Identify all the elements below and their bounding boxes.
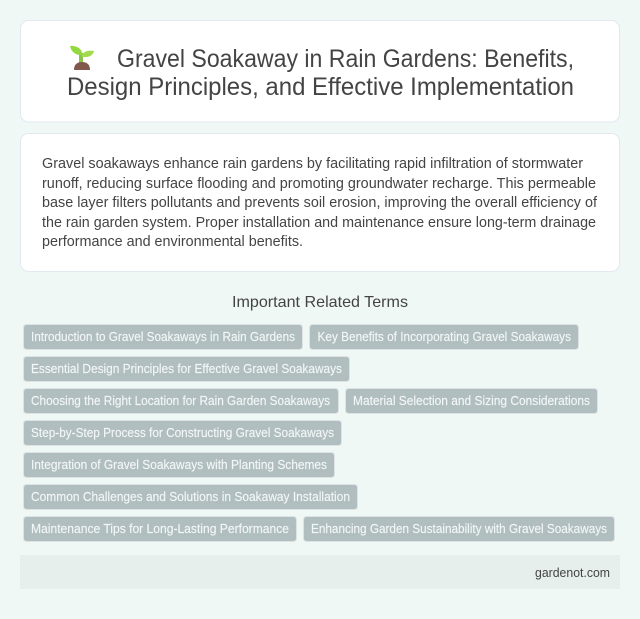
- summary text: the rain garden system. Proper installation and maintenance ensure long-term drainage: [42, 215, 596, 231]
- icon: sprout: [70, 46, 94, 70]
- tag: process: [24, 420, 342, 446]
- tag: material: [346, 388, 598, 414]
- summary text: [42, 156, 598, 250]
- tag: challenges: [24, 484, 358, 510]
- header panel: [20, 20, 620, 122]
- tag: design principles: [24, 356, 350, 382]
- tag: design principles: Essential Design Principles for Effective Gravel Soakaways: [31, 362, 342, 376]
- tag: key benefits: Key Benefits of Incorporating Gravel Soakaways: [318, 330, 571, 344]
- tag: challenges: Common Challenges and Solutions in Soakaway Installation: [31, 490, 350, 504]
- related terms tags: [24, 324, 614, 542]
- tag: material: Material Selection and Sizing Considerations: [353, 394, 590, 408]
- tag: location: Choosing the Right Location for Rain Garden Soakaways: [31, 394, 330, 408]
- tag: introduction: [24, 324, 302, 350]
- summary text: base layer filters pollutants and prevents soil erosion, improving the overall efficiency of: [42, 195, 598, 211]
- tag: planting: Integration of Gravel Soakaways with Planting Schemes: [31, 458, 327, 472]
- title: Design Principles, and Effective Implementation: [67, 73, 574, 101]
- related terms heading: Important Related Terms: [232, 294, 408, 311]
- footer source: gardenot.com: [535, 566, 610, 580]
- footer: [20, 555, 620, 589]
- summary text: runoff, reducing surface flooding and promoting groundwater recharge. This permeable: [42, 176, 596, 192]
- tag: sustainability: [304, 516, 614, 542]
- tag: process: Step-by-Step Process for Constructing Gravel Soakaways: [31, 426, 334, 440]
- tag: introduction: Introduction to Gravel Soakaways in Rain Gardens: [31, 330, 295, 344]
- tag: planting: [24, 452, 334, 478]
- summary text: performance and environmental benefits.: [42, 234, 303, 250]
- tag: maintenance: Maintenance Tips for Long-Lasting Performance: [31, 522, 289, 536]
- tag: sustainability: Enhancing Garden Sustainability with Gravel Soakaways: [311, 522, 607, 536]
- tag: maintenance: [24, 516, 296, 542]
- summary panel: [20, 134, 620, 272]
- tag: location: [24, 388, 338, 414]
- tag: key benefits: [310, 324, 578, 350]
- title: [67, 45, 574, 101]
- summary text: Gravel soakaways enhance rain gardens by facilitating rapid infiltration of stormwater: [42, 156, 583, 172]
- title: Gravel Soakaway in Rain Gardens: Benefits,: [117, 45, 574, 73]
